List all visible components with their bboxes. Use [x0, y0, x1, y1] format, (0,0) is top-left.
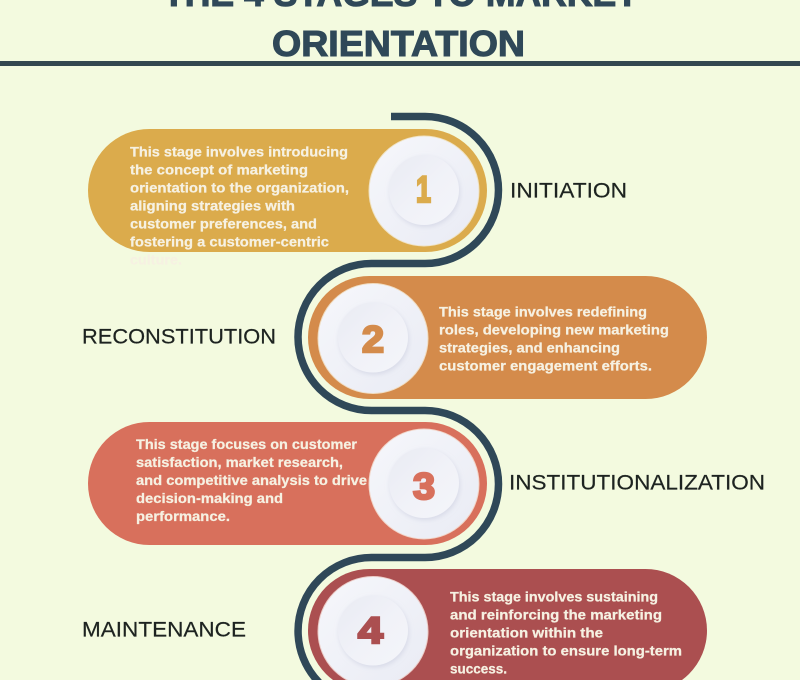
label: initiation: INITIATION [510, 180, 627, 202]
stage 4 description [450, 588, 682, 676]
panel: stage 2 reconstitution [308, 276, 707, 399]
label: maintenance: MAINTENANCE [82, 618, 246, 642]
stage 4 description: and reinforcing the marketing [450, 606, 662, 622]
title [163, 0, 638, 64]
stage 3 pill [88, 422, 487, 545]
stage 1 badge [368, 136, 480, 246]
stage 1 pill [88, 129, 487, 252]
stage 2 description: customer engagement efforts. [439, 358, 652, 374]
stage 3 badge [368, 428, 480, 540]
stage 1 description: This stage involves introducing [130, 144, 348, 160]
stage 4 description: This stage involves sustaining [450, 588, 658, 604]
stage 1 description [130, 144, 349, 268]
stage 3 badge: 3 [413, 466, 435, 507]
stage 2 pill [308, 276, 707, 399]
panel: stage 1 initiation [88, 129, 487, 268]
stage 2 description: roles, developing new marketing [439, 322, 669, 338]
label: reconstitution: RECONSTITUTION [82, 326, 276, 348]
panel: stage 3 institutionalization [88, 422, 487, 545]
stage 3 description: This stage focuses on customer [136, 436, 358, 452]
stage 4 description: orientation within the [450, 624, 603, 640]
stage 2 description [439, 304, 669, 374]
stage 1 description: aligning strategies with [130, 198, 295, 214]
stage 1 description: fostering a customer-centric [130, 234, 329, 250]
stage 4 badge: 4 [358, 610, 384, 651]
stage 2 badge [318, 283, 428, 394]
stage 4 pill [308, 569, 707, 680]
stage 1 description: the concept of marketing [130, 162, 308, 178]
stage 2 description: strategies, and enhancing [439, 340, 620, 356]
stage 3 description: performance. [136, 508, 230, 524]
stage 4 badge [318, 576, 428, 680]
stage 4 description: success. [450, 660, 507, 676]
stage 3 description: decision-making and [136, 490, 283, 506]
stage 1 description: orientation to the organization, [130, 180, 349, 196]
stage 4 description: organization to ensure long-term [450, 642, 682, 658]
stage 1 description: customer preferences, and [130, 216, 317, 232]
stage 3 description [136, 436, 367, 524]
stage 3 description: and competitive analysis to drive [136, 472, 367, 488]
stage 1 badge: 1 [416, 169, 431, 210]
stage 2 badge: 2 [362, 319, 384, 360]
title: ORIENTATION [272, 23, 525, 64]
stage 3 description: satisfaction, market research, [136, 454, 343, 470]
serpentine connector line [298, 116, 498, 680]
label: institutionalization: INSTITUTIONALIZATION [509, 472, 765, 494]
stage 1 description: culture. [130, 252, 182, 268]
stage 2 description: This stage involves redefining [439, 304, 647, 320]
title divider rule [0, 61, 800, 66]
panel: stage 4 maintenance [308, 569, 707, 680]
